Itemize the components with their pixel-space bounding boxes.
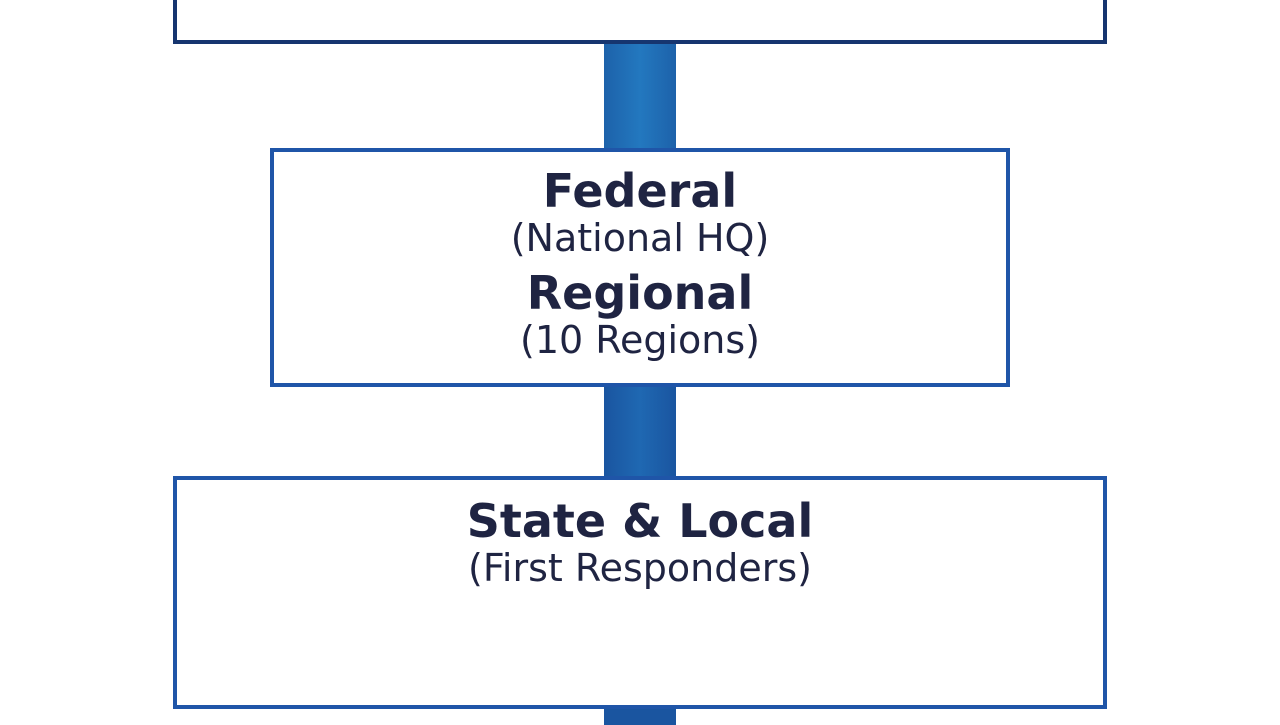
connector: top to federal (604, 40, 676, 152)
subtitle: First Responders: (First Responders) (468, 546, 812, 590)
box: state & local (173, 476, 1107, 709)
heading: Federal: Federal (543, 164, 737, 218)
connector: federal to state (604, 384, 676, 480)
subtitle: National HQ: (National HQ) (511, 216, 769, 260)
box: top level (cropped) (173, 0, 1107, 44)
heading: State & Local: State & Local (467, 494, 813, 548)
box: federal / regional (270, 148, 1010, 387)
connector: below state (604, 705, 676, 725)
heading: Regional: Regional (527, 266, 753, 320)
subtitle: 10 Regions: (10 Regions) (520, 318, 760, 362)
